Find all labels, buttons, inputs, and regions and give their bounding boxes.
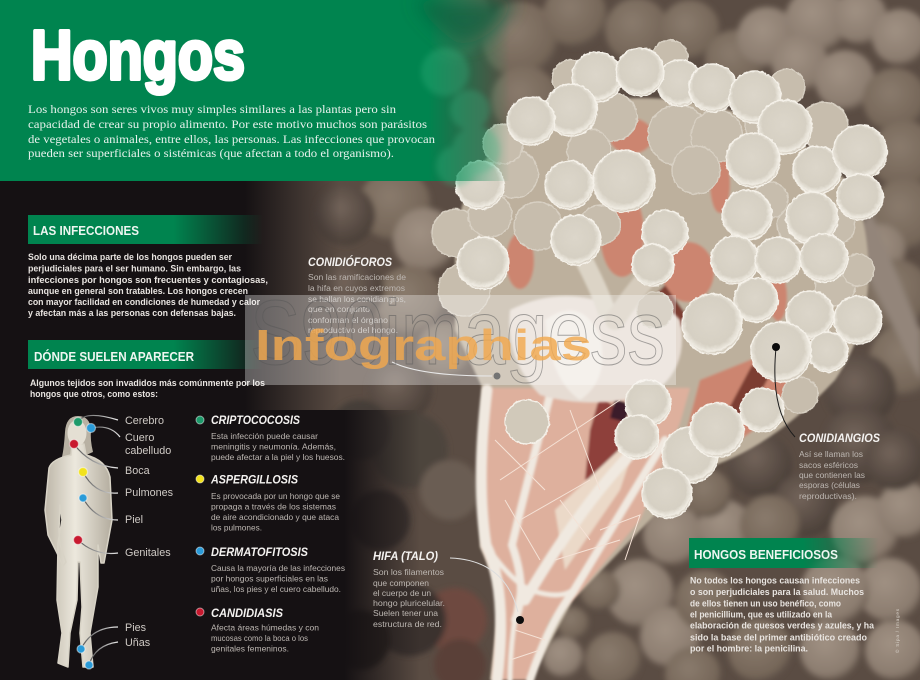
arrow: conidiangios leader (772, 343, 795, 437)
disease: dermatofitosis: uñas, los pies y el cuero cabelludo. (211, 584, 341, 594)
panel: donde suelen aparecer (28, 340, 265, 399)
text: intro tejidos: Algunos tejidos son invadidos más comúnmente por los (30, 378, 265, 388)
callout: hifa talo: que componen (373, 578, 429, 588)
disease: criptococosis: puede afectar a la piel y los huesos. (211, 452, 345, 462)
title: Hongos (31, 16, 245, 94)
callout: hifa talo: estructura de red. (373, 619, 442, 629)
disease: candidiasis: genitales femeninos. (211, 644, 289, 654)
disease: candidiasis: Afecta áreas húmedas y con (211, 622, 319, 632)
intro text: de vegetales o animales, entre ellos, las personas. Las infecciones que provocan (28, 134, 435, 146)
disease: dermatofitosis (196, 545, 345, 594)
green header band (0, 0, 515, 186)
heading: donde suelen aparecer (28, 340, 263, 369)
body labels: cabelludo (125, 445, 171, 457)
stem interior (482, 388, 690, 680)
disease: dermatofitosis: DERMATOFITOSIS (211, 545, 308, 559)
photo: fungus body and stem (455, 98, 869, 680)
callout: conidiangios: Así se llaman los (799, 449, 863, 459)
text: hongos beneficiosos: No todos los hongos causan infecciones (690, 576, 860, 586)
disease: aspergillosis (196, 472, 340, 532)
text: las infecciones: con mayor facilidad en condiciones de humedad y calor (28, 297, 260, 307)
text: intro tejidos (30, 378, 265, 399)
body labels: Genitales (125, 547, 171, 559)
panel: hongos beneficiosos (689, 538, 879, 654)
text: intro tejidos: hongos que otros, como estos: (30, 389, 158, 399)
text: las infecciones: perjudiciales para el ser humano. Sin embargo, las (28, 264, 241, 274)
heading: donde suelen aparecer: DÓNDE SUELEN APARECER (34, 349, 195, 364)
disease: candidiasis (196, 606, 319, 654)
photo credit: © Sipa / Images (894, 608, 900, 653)
body labels: Pulmones (125, 487, 174, 499)
panel: las infecciones (28, 215, 268, 318)
leader lines (74, 415, 120, 665)
disease: candidiasis: CANDIDIASIS (211, 606, 283, 620)
left dark panel overlay (0, 170, 420, 680)
crumpled white sheet behind watermark (509, 245, 682, 402)
callout: conidiangios: sacos esféricos (799, 460, 858, 470)
body labels: Piel (125, 514, 143, 526)
disease: criptococosis (196, 413, 345, 462)
text: hongos beneficiosos (690, 576, 875, 654)
heading: hongos beneficiosos (689, 538, 879, 568)
text: las infecciones: Solo una décima parte de los hongos pueden ser (28, 252, 232, 262)
heading: las infecciones (28, 215, 263, 244)
heading: las infecciones: LAS INFECCIONES (33, 223, 139, 238)
disease: criptococosis: Esta infección puede causar (211, 431, 318, 441)
callout: conidioforos: conforman el órgano (308, 315, 388, 325)
disease: aspergillosis: de aire acondicionado y que ataca (211, 512, 339, 522)
disease: aspergillosis: los pulmones. (211, 522, 262, 532)
callout: hifa talo (373, 549, 445, 629)
body labels: Uñas (125, 637, 151, 649)
intro text (28, 104, 435, 160)
disease: criptococosis: meningitis y neumonía. Además, (211, 442, 336, 452)
callout: hifa talo: Suelen tener una (373, 608, 438, 618)
intro text: Los hongos son seres vivos muy simples similares a las plantas pero sin (28, 104, 396, 116)
text: las infecciones (28, 252, 268, 318)
text: hongos beneficiosos: de ellos tienen un uso benéfico, como (690, 598, 841, 608)
callout: conidioforos: Son las ramificaciones de (308, 272, 406, 282)
text: las infecciones: y afectan más a las personas con defensas bajas. (28, 308, 236, 318)
disease: aspergillosis: ASPERGILLOSIS (210, 472, 298, 486)
text: las infecciones: aunque en general son tratables. Los hongos crecen (28, 286, 248, 296)
callout: hifa talo: el cuerpo de un (373, 588, 431, 598)
disease: dermatofitosis: Causa la mayoría de las infecciones (211, 563, 345, 573)
disease: aspergillosis: propaga a través de los sistemas (211, 502, 336, 512)
callout: conidioforos: reproductivo del hongo. (308, 325, 398, 335)
heading: hongos beneficiosos: HONGOS BENEFICIOSOS (694, 547, 838, 562)
callout: conidiangios (799, 431, 880, 501)
text: hongos beneficiosos: elaboración de quesos verdes y azules, y ha (690, 620, 875, 630)
disease: criptococosis: CRIPTOCOCOSIS (211, 413, 300, 427)
callout: hifa talo: hongo pluricelular. (373, 598, 445, 608)
callout: hifa talo: HIFA (TALO) (373, 549, 438, 563)
intro text: capacidad de crear su propio alimento. Por este motivo muchos son parásitos (28, 119, 428, 131)
body labels: Boca (125, 465, 150, 477)
watermark: S90imagess (250, 282, 665, 384)
photo: spores (conidia) (432, 40, 887, 518)
callout: conidioforos (308, 254, 406, 335)
callout: hifa talo: Son los filamentos (373, 567, 444, 577)
callout: conidiangios: CONIDIANGIOS (799, 431, 880, 445)
text: hongos beneficiosos: el penicillium, que es utilizado en la (690, 610, 833, 620)
intro text: pueden ser superficiales o sistémicas (que afectan a todo el organismo). (28, 148, 394, 160)
body diagram (45, 415, 174, 669)
disease: dermatofitosis: por hongos superficiales en las (211, 574, 328, 584)
callout: conidioforos: la hifa en cuyos extremos (308, 283, 405, 293)
body labels: Pies (125, 622, 147, 634)
disease: candidiasis: mucosas como la boca o los (211, 633, 308, 643)
text: hongos beneficiosos: sido la base del primer antibiótico creado (690, 632, 867, 642)
callout: conidioforos: CONIDIÓFOROS (308, 254, 392, 269)
icon: female figure (45, 416, 112, 667)
callout: conidioforos: se hallan los conidiangios, (308, 294, 406, 304)
text: hongos beneficiosos: o son perjudiciales para la salud. Muchos (690, 587, 864, 597)
body labels: Cuero (125, 432, 154, 444)
watermark: Infographias (255, 321, 592, 370)
callout: conidiangios: esporas (células (799, 480, 860, 490)
text: hongos beneficiosos: por el hombre: la penicilina. (690, 644, 808, 654)
body labels: Cerebro (125, 415, 164, 427)
callout: conidioforos: que en conjunto (308, 304, 370, 314)
marker dots (70, 418, 96, 669)
callout: conidiangios: reproductivas). (799, 491, 857, 501)
callout: conidiangios: que contienen las (799, 470, 865, 480)
disease: aspergillosis: Es provocada por un hongo que se (211, 491, 340, 501)
arrow: conidioforos leader (392, 362, 500, 380)
text: las infecciones: infecciones por hongos son frecuentes y contagiosas, (28, 275, 268, 285)
body labels (125, 415, 174, 649)
arrow: hifa leader (450, 558, 524, 624)
